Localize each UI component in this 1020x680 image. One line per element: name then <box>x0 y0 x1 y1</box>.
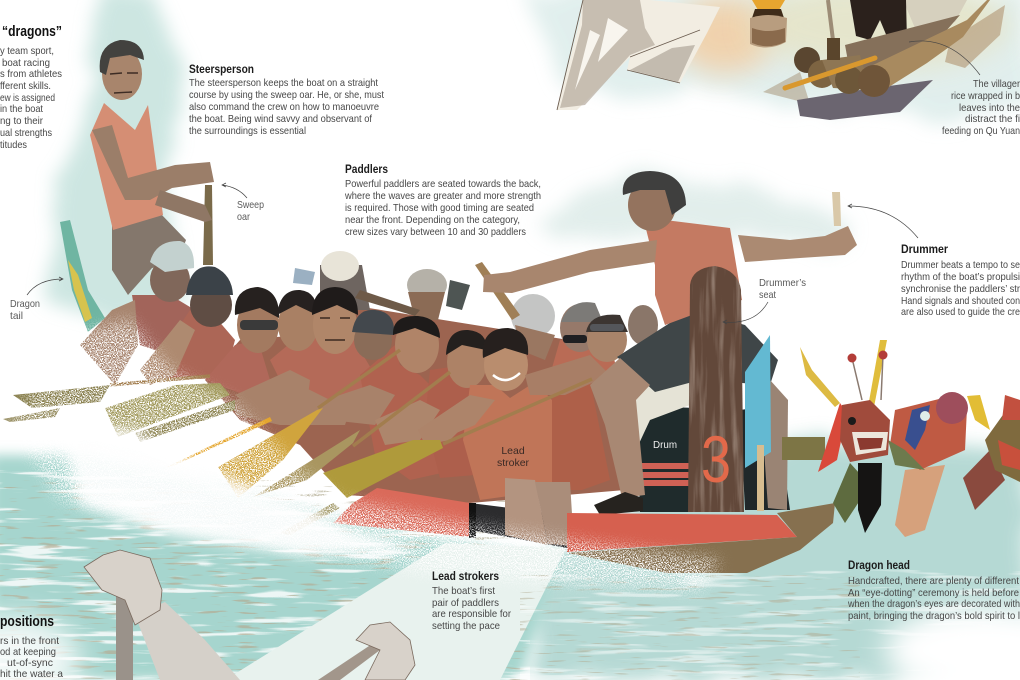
first dragon head <box>800 340 890 533</box>
shorts <box>617 310 778 392</box>
heading: the "dragons": “dragons” <box>2 23 62 40</box>
bow <box>567 503 835 573</box>
text block: team sport intro: ng to their <box>0 115 43 127</box>
text block: steersperson: Steersperson <box>189 62 254 76</box>
text block: team sport intro: y team sport, <box>0 45 54 57</box>
label: sweep oar: Sweep <box>237 199 264 211</box>
label: dragon tail: tail <box>10 310 23 322</box>
text block: steersperson: The steersperson keeps the boat on a straight <box>189 77 378 89</box>
text block: positions: hit the water a <box>0 668 63 680</box>
label: lead stroker: Lead <box>501 445 525 457</box>
text block: paddlers: crew sizes vary between 10 and 30 paddlers <box>345 226 526 238</box>
handles <box>110 350 592 446</box>
forearm <box>135 602 240 680</box>
drummer left arm <box>483 240 657 293</box>
text block: team sport intro <box>0 45 62 151</box>
label: lead stroker <box>497 445 530 469</box>
drummer figure <box>483 171 857 515</box>
text block: lead strokers: Lead strokers <box>432 569 499 583</box>
text block: steersperson: course by using the sweep oar. He, or she, must <box>189 89 384 101</box>
text block: steersperson: the boat. Being wind savvy and observant of <box>189 113 372 125</box>
label: lead stroker: stroker <box>497 457 530 469</box>
left fist <box>84 550 162 625</box>
text block: lead strokers: The boat’s first <box>432 585 495 597</box>
spray and splashes <box>10 320 720 590</box>
vest <box>645 220 742 325</box>
label: dragon tail: Dragon <box>10 298 40 310</box>
text block: team sport intro: s from athletes <box>0 68 62 80</box>
text block: dragon head: Dragon head <box>848 558 910 572</box>
label: sweep oar: oar <box>237 211 250 223</box>
sweep oar <box>203 185 213 265</box>
dragon boat hull <box>333 478 835 573</box>
text block: paddlers: Powerful paddlers are seated towards the back, <box>345 178 541 190</box>
illustration: oil lantern <box>750 0 787 48</box>
label: drummer's seat: Drummer’s <box>759 277 806 289</box>
rear hull <box>333 488 470 537</box>
text block: team sport intro: ual strengths <box>0 127 52 139</box>
white cloth <box>625 375 690 450</box>
text block: lead strokers: are responsible for <box>432 608 511 620</box>
paddle shaft right <box>318 642 380 680</box>
front paddlers group <box>325 310 487 480</box>
text block: paddlers: is required. Those with good timing are seated <box>345 202 534 214</box>
drummer's seat back <box>688 266 744 512</box>
heading: positions: positions <box>0 613 54 630</box>
text block: team sport intro: ew is assigned <box>0 92 55 104</box>
illustration: offering figure's robe <box>557 0 720 110</box>
text block: paddlers: near the front. Depending on the category, <box>345 214 520 226</box>
head <box>628 179 676 231</box>
text block: team sport intro: in the boat <box>0 103 43 115</box>
text block: positions <box>0 635 63 680</box>
label: drum: Drum <box>653 439 677 451</box>
text block: lead strokers <box>432 569 511 632</box>
text block: drummer <box>848 204 1020 318</box>
text block: dragon head <box>847 558 1020 622</box>
crew mass backing <box>205 305 625 503</box>
spotlight beam under the cutaway <box>225 543 566 680</box>
text block: steersperson: also command the crew on how to manoeuvre <box>189 101 379 113</box>
text block: steersperson <box>189 62 384 137</box>
paddle shaft left <box>116 590 133 680</box>
drum <box>637 407 692 512</box>
label: sweep oar <box>222 183 264 223</box>
label: dragon tail <box>10 277 63 322</box>
text block: paddlers: where the waves are greater and more strength <box>344 190 541 202</box>
boat number three: 3 <box>701 422 731 496</box>
steersperson figure <box>90 40 214 295</box>
rear paddler pair in spray <box>80 241 235 385</box>
hair <box>100 40 144 75</box>
vest <box>90 103 163 230</box>
hair <box>623 171 686 215</box>
text block: team sport intro: boat racing <box>2 57 50 69</box>
text block: positions: rs in the front <box>0 635 59 647</box>
front hull <box>567 513 797 552</box>
cutaway interior <box>470 503 567 548</box>
drummer right arm <box>738 226 857 262</box>
arms <box>92 125 214 200</box>
blue flag <box>745 335 771 468</box>
text block: team sport intro: fferent skills. <box>0 80 51 92</box>
distant boat <box>782 437 825 460</box>
text block: positions: ut-of-sync <box>7 657 53 669</box>
water surface, right <box>520 570 1020 680</box>
text block: paddlers: Paddlers <box>345 162 388 176</box>
second dragon head <box>888 392 968 537</box>
text block: villagers <box>909 41 1020 137</box>
mid paddlers group <box>205 287 375 425</box>
oars <box>3 350 592 535</box>
leg <box>590 358 650 498</box>
shorts <box>112 213 186 295</box>
text block: lead strokers: setting the pace <box>432 620 500 632</box>
text block: drummer: Drummer <box>901 242 948 256</box>
water surface, left <box>0 455 560 680</box>
text block: team sport intro: titudes <box>0 139 27 151</box>
right fist <box>356 622 415 680</box>
dragon tail <box>60 220 105 332</box>
text block: paddlers <box>344 162 541 238</box>
back row paddlers <box>205 251 658 503</box>
label: drummer's seat <box>723 277 806 324</box>
text block: positions: od at keeping <box>0 646 56 658</box>
text block: steersperson: the surroundings is essential <box>189 125 306 137</box>
dragon heads <box>782 340 1020 537</box>
label: drummer's seat: seat <box>759 289 776 301</box>
drum stick <box>832 192 841 226</box>
head <box>102 48 142 100</box>
third dragon head <box>963 395 1020 510</box>
illustration: bamboo raft <box>763 0 1005 120</box>
capped paddlers behind <box>320 265 370 310</box>
shoe <box>594 492 643 515</box>
hands holding a paddle <box>84 550 415 680</box>
lead stroker <box>418 328 610 500</box>
text block: lead strokers: pair of paddlers <box>432 597 499 609</box>
